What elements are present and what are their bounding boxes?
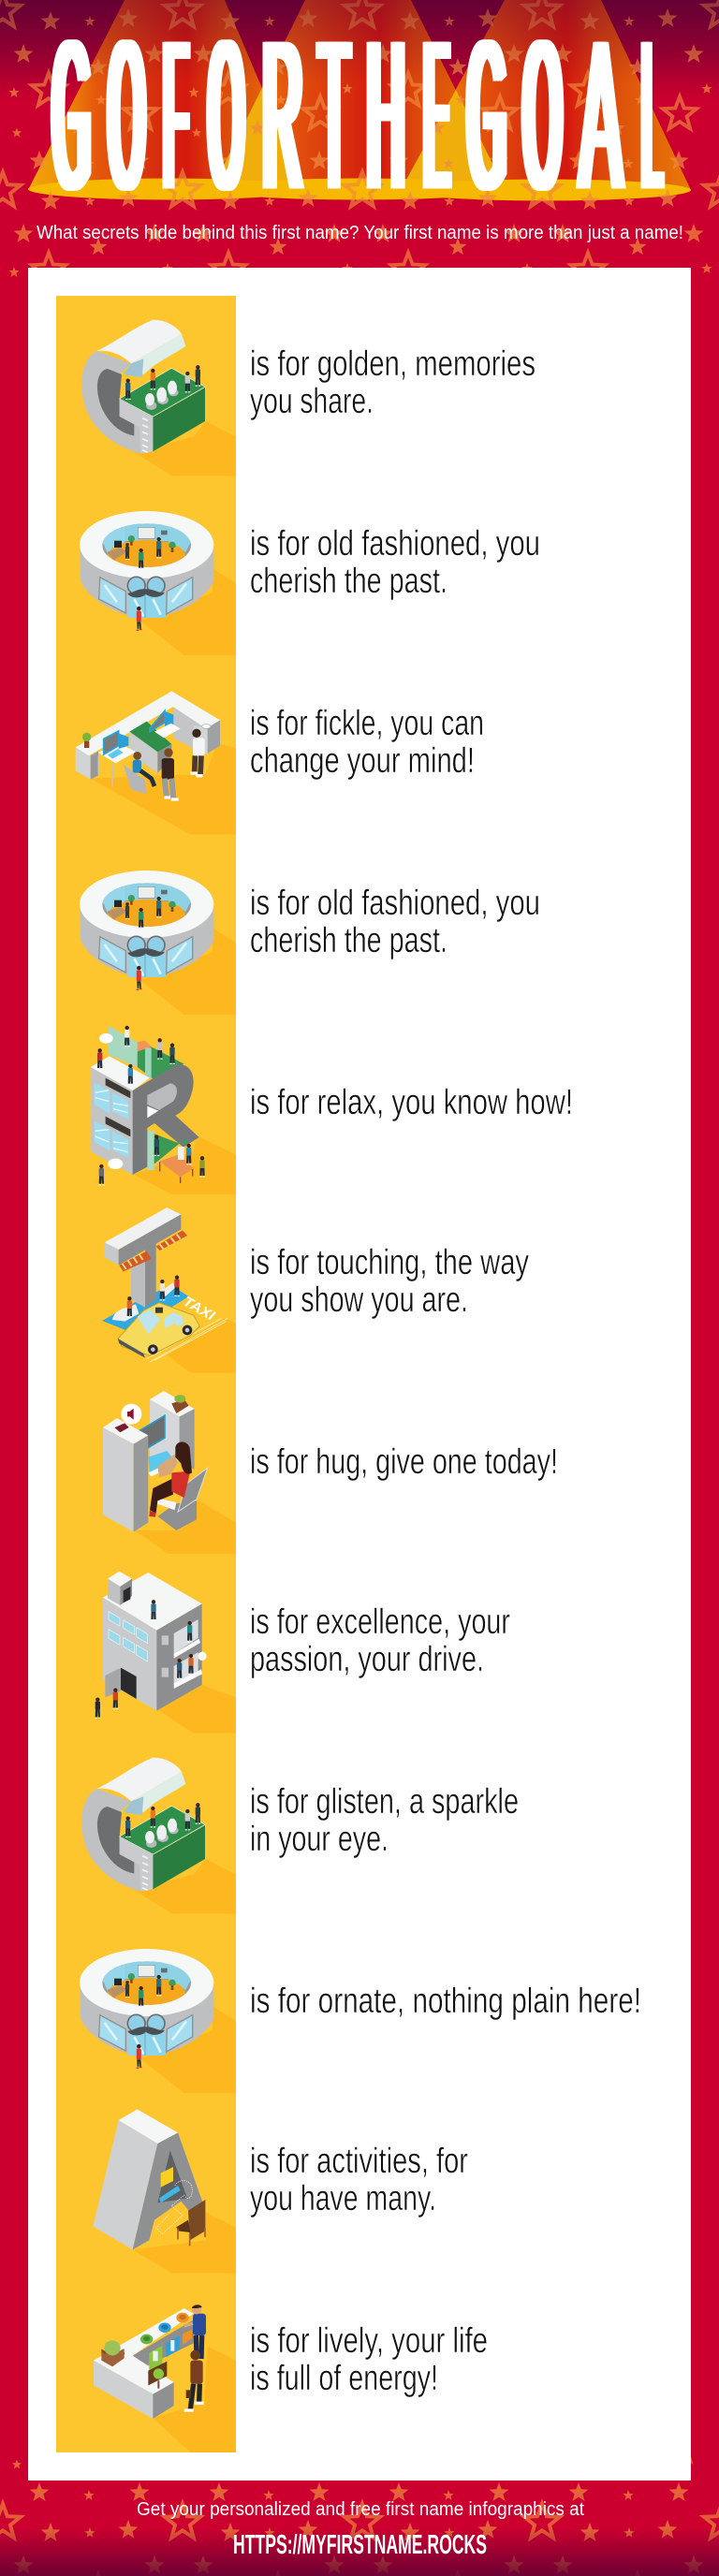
footer invitation: Get your personalized and free first name infographics at bbox=[137, 2499, 584, 2520]
text: activities: you have many. bbox=[250, 2179, 436, 2218]
title bbox=[51, 6, 665, 257]
text: golden bbox=[250, 344, 536, 421]
title: E bbox=[423, 6, 451, 257]
text: excellence: passion, your drive. bbox=[250, 1640, 484, 1679]
title: O bbox=[207, 6, 245, 257]
text: fickle: is for fickle, you can bbox=[250, 704, 484, 743]
text: old fashioned: cherish the past. bbox=[250, 921, 448, 960]
row 3: F fickle bbox=[76, 691, 484, 835]
text: glisten: is for glisten, a sparkle bbox=[250, 1782, 519, 1822]
white content panel bbox=[28, 268, 691, 2481]
title: F bbox=[162, 6, 190, 257]
text: touching: you show you are. bbox=[250, 1281, 468, 1320]
row 7: H hug bbox=[103, 1391, 558, 1554]
row 10: O ornate bbox=[80, 1949, 641, 2093]
title: O bbox=[107, 6, 146, 257]
icon: letter A building bbox=[93, 2109, 236, 2273]
row 12: L lively bbox=[94, 2305, 488, 2452]
icon: letter G building bbox=[81, 320, 236, 476]
text: excellence: is for excellence, your bbox=[250, 1603, 510, 1642]
icon: letter O optician bbox=[80, 871, 236, 1015]
text: touching bbox=[250, 1243, 529, 1320]
row 5: R relax bbox=[91, 1026, 573, 1194]
icon: letter O optician bbox=[80, 511, 236, 655]
text: lively: is full of energy! bbox=[250, 2359, 438, 2398]
row 11: A activities bbox=[93, 2109, 468, 2273]
dark top fade under spotlights bbox=[0, 0, 719, 103]
text: old fashioned bbox=[250, 884, 540, 960]
title: G bbox=[51, 6, 91, 257]
text: old fashioned: is for old fashioned, you bbox=[250, 524, 540, 564]
text: golden: is for golden, memories bbox=[250, 344, 536, 384]
text: lively: is for lively, your life bbox=[250, 2321, 488, 2361]
yellow icon column bbox=[56, 296, 236, 2452]
title: L bbox=[640, 6, 664, 257]
text: activities bbox=[250, 2142, 468, 2218]
spotlights bbox=[28, 0, 691, 200]
star pattern top bbox=[0, 0, 719, 281]
title: R bbox=[260, 6, 301, 257]
text: old fashioned: is for old fashioned, you bbox=[250, 884, 540, 923]
icon: letter F office bbox=[76, 691, 236, 835]
text: hug: is for hug, give one today! bbox=[250, 1442, 558, 1482]
title: G bbox=[465, 6, 506, 257]
icon: letter E building bbox=[95, 1572, 236, 1734]
text: old fashioned: cherish the past. bbox=[250, 562, 448, 601]
text: activities: is for activities, for bbox=[250, 2142, 468, 2181]
icon: letter G building bbox=[81, 1758, 236, 1913]
icon: letter L recycling station bbox=[94, 2305, 236, 2452]
text: fickle: change your mind! bbox=[250, 741, 475, 781]
icon: letter O optician bbox=[80, 1949, 236, 2093]
icon: letter T taxi stand bbox=[102, 1208, 236, 1373]
star pattern bottom bbox=[0, 2457, 719, 2576]
text: lively bbox=[250, 2321, 488, 2398]
text: glisten bbox=[250, 1782, 519, 1859]
text: golden: you share. bbox=[250, 382, 374, 421]
row 2: O old fashioned bbox=[80, 511, 540, 655]
text: excellence bbox=[250, 1603, 510, 1679]
icon: letter T taxi stand: TAXI bbox=[179, 1295, 218, 1324]
title: H bbox=[365, 6, 406, 257]
text: glisten: in your eye. bbox=[250, 1820, 389, 1859]
dark top fade over spotlights bbox=[0, 0, 719, 84]
row 4: O old fashioned bbox=[80, 871, 540, 1015]
text: fickle bbox=[250, 704, 484, 781]
footer url: HTTPS://MYFIRSTNAME.ROCKS bbox=[233, 2530, 487, 2560]
text: touching: is for touching, the way bbox=[250, 1243, 529, 1282]
dark bottom fade bbox=[0, 2527, 719, 2576]
row 8: E excellence bbox=[95, 1572, 510, 1734]
title: O bbox=[521, 6, 563, 257]
row 9: G glisten bbox=[81, 1758, 519, 1913]
text: old fashioned bbox=[250, 524, 540, 601]
icon: letter H desk bbox=[103, 1391, 236, 1554]
text: relax: is for relax, you know how! bbox=[250, 1083, 573, 1122]
row 1: G golden bbox=[81, 320, 536, 476]
row 6: T touching bbox=[102, 1208, 529, 1373]
icon: letter R building bbox=[91, 1026, 236, 1194]
title: A bbox=[580, 6, 623, 257]
subtitle: What secrets hide behind this first name? Your first name is more than just a name! bbox=[37, 223, 683, 243]
title: T bbox=[317, 6, 350, 257]
